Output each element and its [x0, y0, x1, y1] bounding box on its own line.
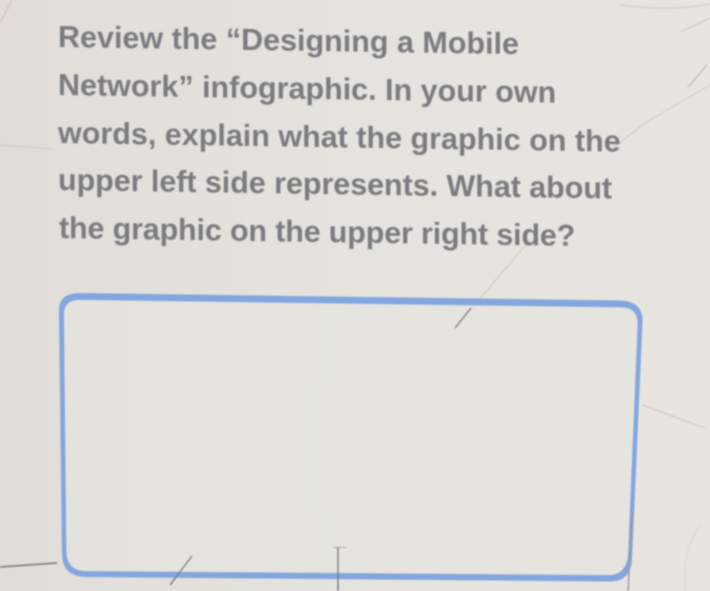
question text: upper left side represents. What about [58, 163, 612, 206]
question text: words, explain what the graphic on the [58, 116, 621, 158]
question text: Review the “Designing a Mobile [58, 20, 519, 61]
question text: Network” infographic. In your own [58, 68, 556, 109]
question text [57, 20, 621, 253]
question text: the graphic on the upper right side? [59, 211, 575, 253]
